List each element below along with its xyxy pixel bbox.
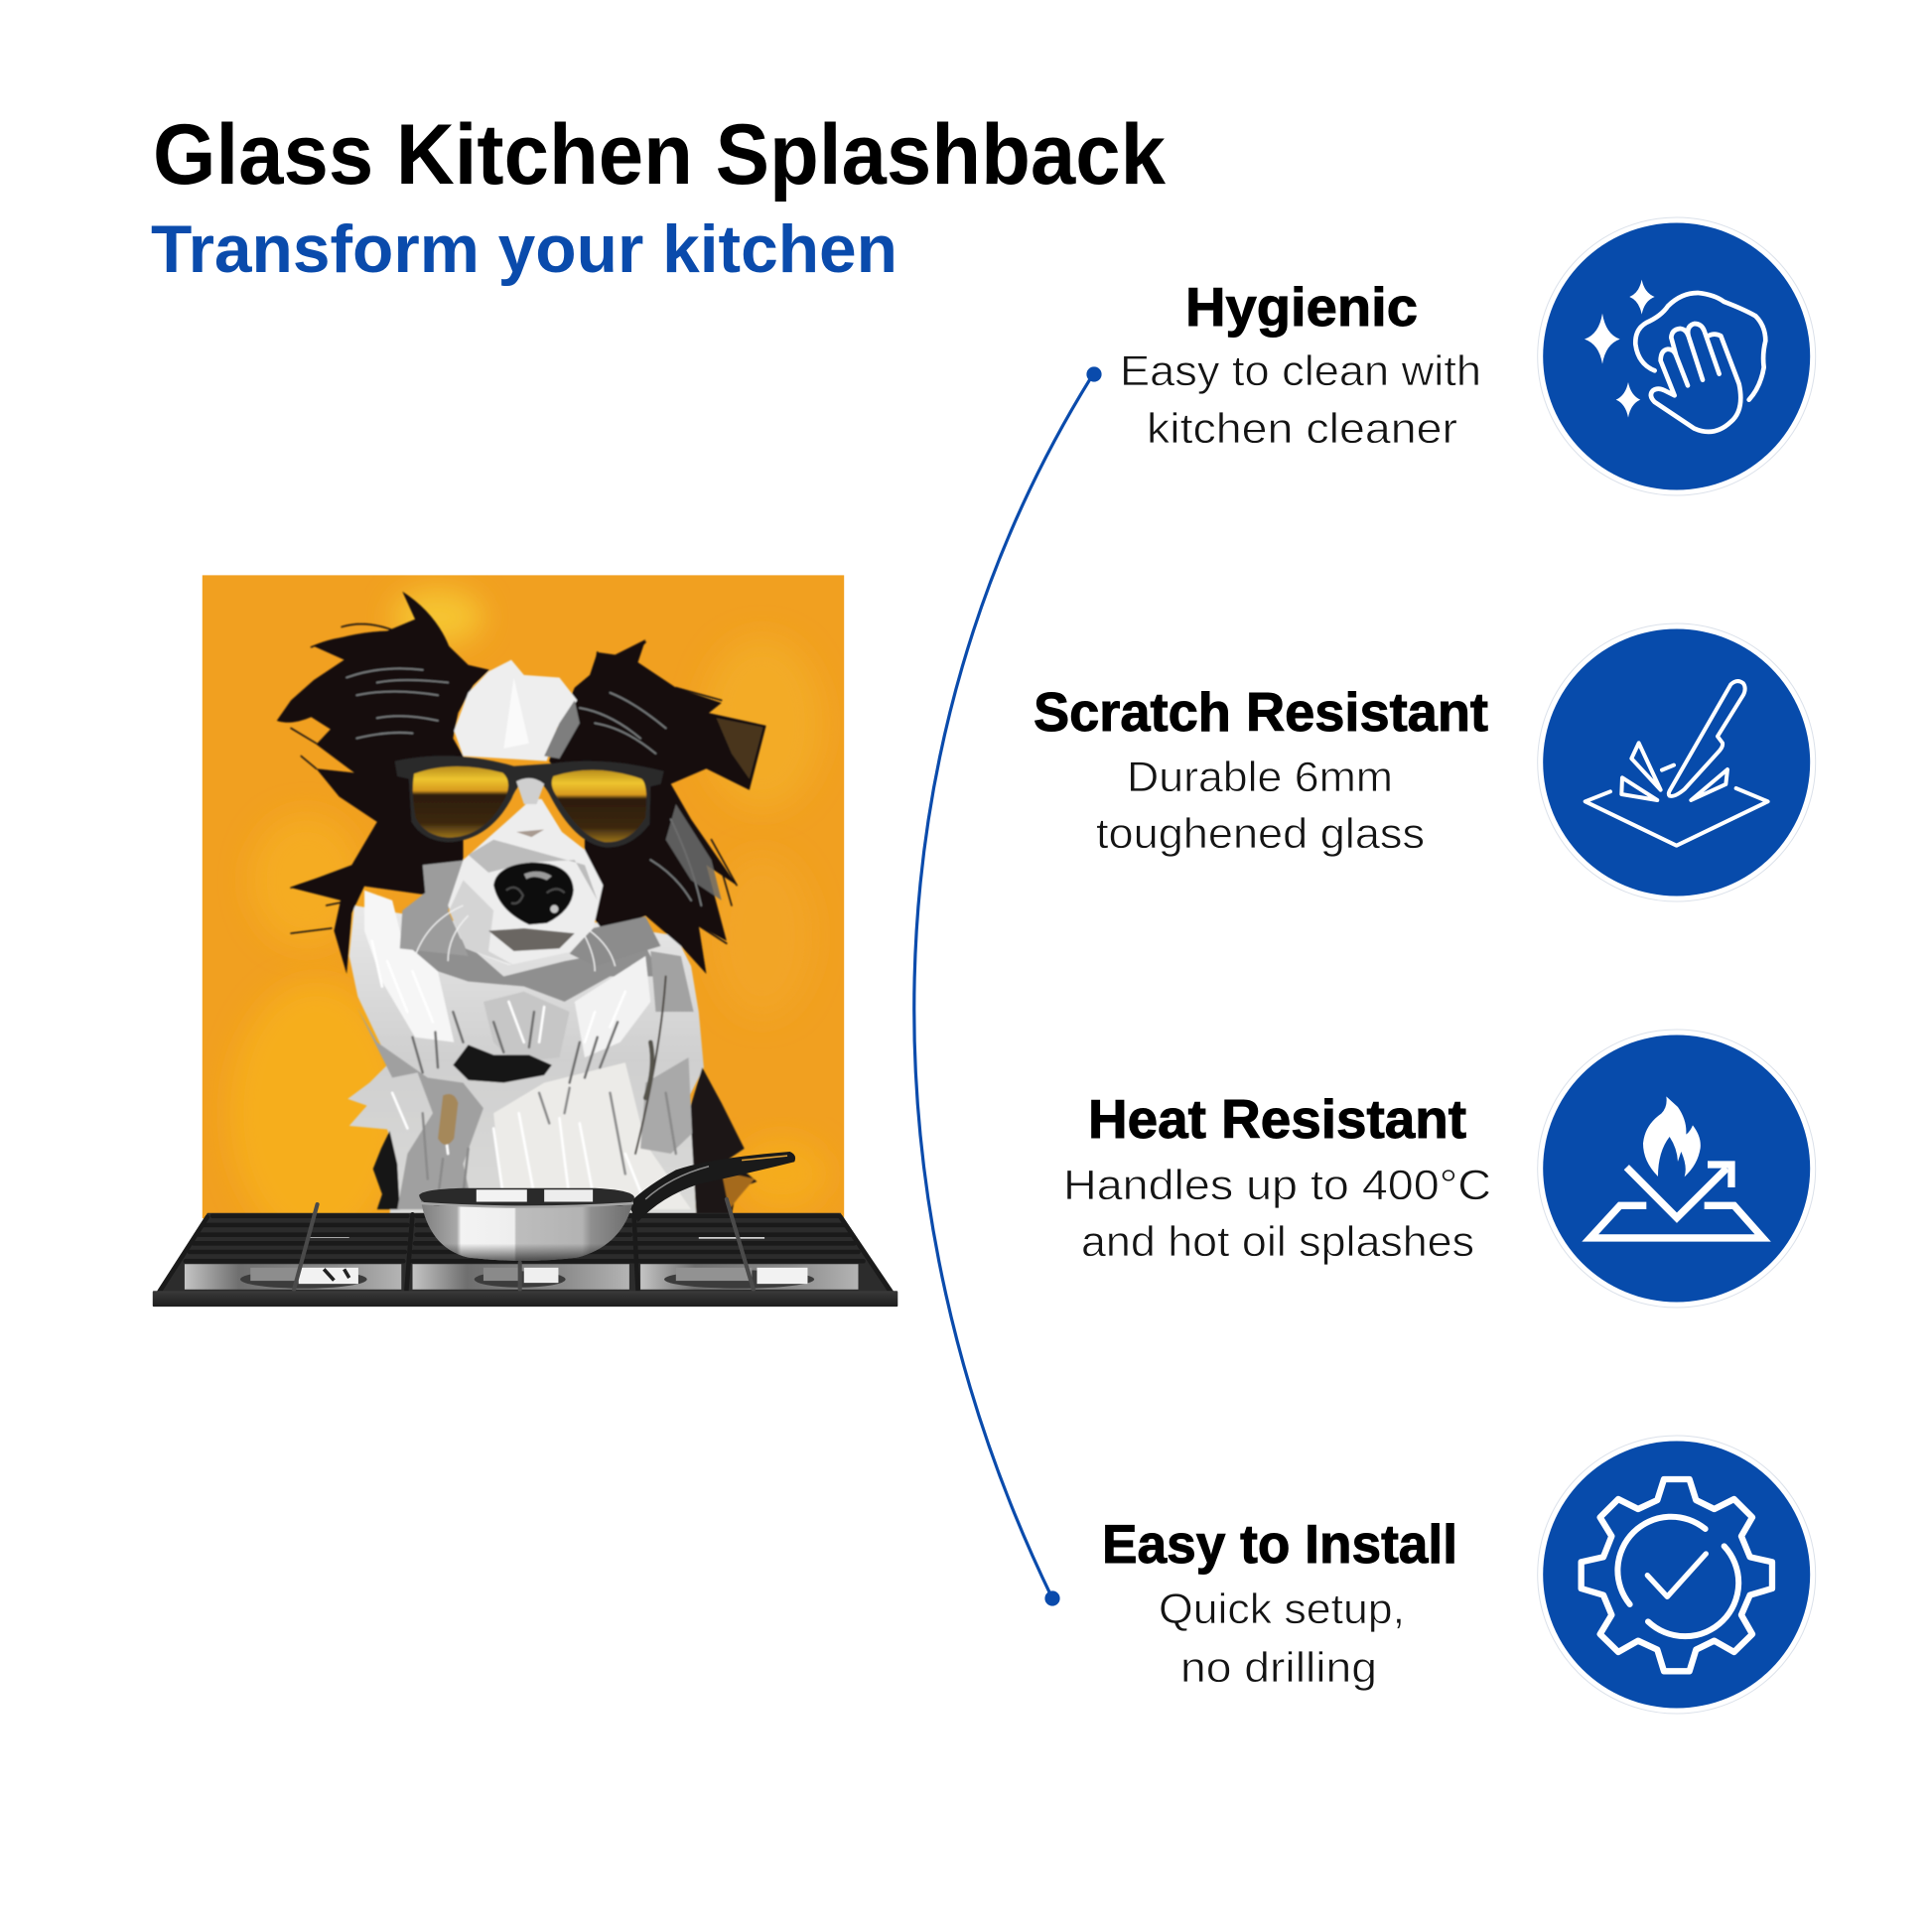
feature text: Heat Resistant: and hot oil splashes	[1081, 1218, 1474, 1266]
feature text: Heat Resistant: Handles up to 400°C	[1063, 1162, 1491, 1209]
hob plate	[157, 1213, 894, 1292]
feature text: Scratch Resistant	[1034, 681, 1488, 858]
gray cheek left	[400, 860, 469, 956]
icon: knife scratching glass	[1538, 623, 1816, 901]
icon: flame reflecting off surface	[1538, 1030, 1816, 1308]
burner centre	[475, 1268, 566, 1288]
gas hob	[153, 1199, 897, 1307]
sunglasses	[395, 756, 664, 847]
handle	[627, 1152, 795, 1222]
gray cheek right	[570, 916, 661, 966]
product illustration: dog splashback above stove	[153, 575, 897, 1307]
collar tag	[438, 1094, 458, 1145]
feature text: Easy to Install: Easy to Install	[1102, 1513, 1457, 1575]
feature text: Hygienic	[1120, 276, 1481, 453]
feature text: Heat Resistant	[1063, 1088, 1491, 1266]
feature text: Easy to Install	[1102, 1513, 1457, 1692]
feature text: Hygienic: kitchen cleaner	[1147, 405, 1457, 453]
feature text: Scratch Resistant: Scratch Resistant	[1034, 681, 1488, 743]
whiskers	[415, 905, 616, 971]
subtitle: Transform your kitchen	[151, 211, 897, 287]
dog illustration	[277, 592, 766, 1214]
feature text: Easy to Install: no drilling	[1180, 1644, 1377, 1692]
frying pan	[419, 1152, 795, 1261]
burner right	[664, 1268, 814, 1289]
pan rim	[419, 1188, 634, 1206]
title: Glass Kitchen Splashback	[153, 107, 1166, 203]
feature text: Heat Resistant: Heat Resistant	[1088, 1088, 1466, 1150]
grate bars	[160, 1214, 890, 1291]
right ear and head black	[549, 639, 766, 974]
nose	[493, 863, 574, 924]
feature text: Easy to Install: Quick setup,	[1159, 1586, 1405, 1633]
feature text: Scratch Resistant: Durable 6mm	[1127, 754, 1393, 801]
icon: hand wiping with cloth and sparkles	[1538, 217, 1816, 495]
burner left	[240, 1268, 367, 1289]
front band	[153, 1291, 897, 1307]
burner wells	[185, 1264, 401, 1290]
fur strokes	[372, 941, 676, 1204]
feature text: Hygienic: Hygienic	[1185, 276, 1418, 338]
rear burner glints	[310, 1233, 764, 1239]
left ear and head black	[277, 592, 489, 974]
body fur	[347, 905, 704, 1214]
icon: gear with check mark	[1538, 1436, 1816, 1714]
collar	[453, 1044, 552, 1083]
white forehead blaze	[454, 660, 577, 761]
splashback panel background	[203, 575, 844, 1245]
feature text: Scratch Resistant: toughened glass	[1096, 810, 1425, 858]
pan bowl	[421, 1199, 633, 1261]
ear highlights	[346, 668, 701, 905]
muzzle	[448, 799, 603, 965]
gray fur shading	[397, 905, 661, 1002]
feature text: Hygienic: Easy to clean with	[1120, 347, 1481, 395]
black rear shoulder	[690, 1067, 757, 1214]
ear wisps	[291, 624, 737, 943]
connector curve with end dots	[914, 366, 1102, 1606]
